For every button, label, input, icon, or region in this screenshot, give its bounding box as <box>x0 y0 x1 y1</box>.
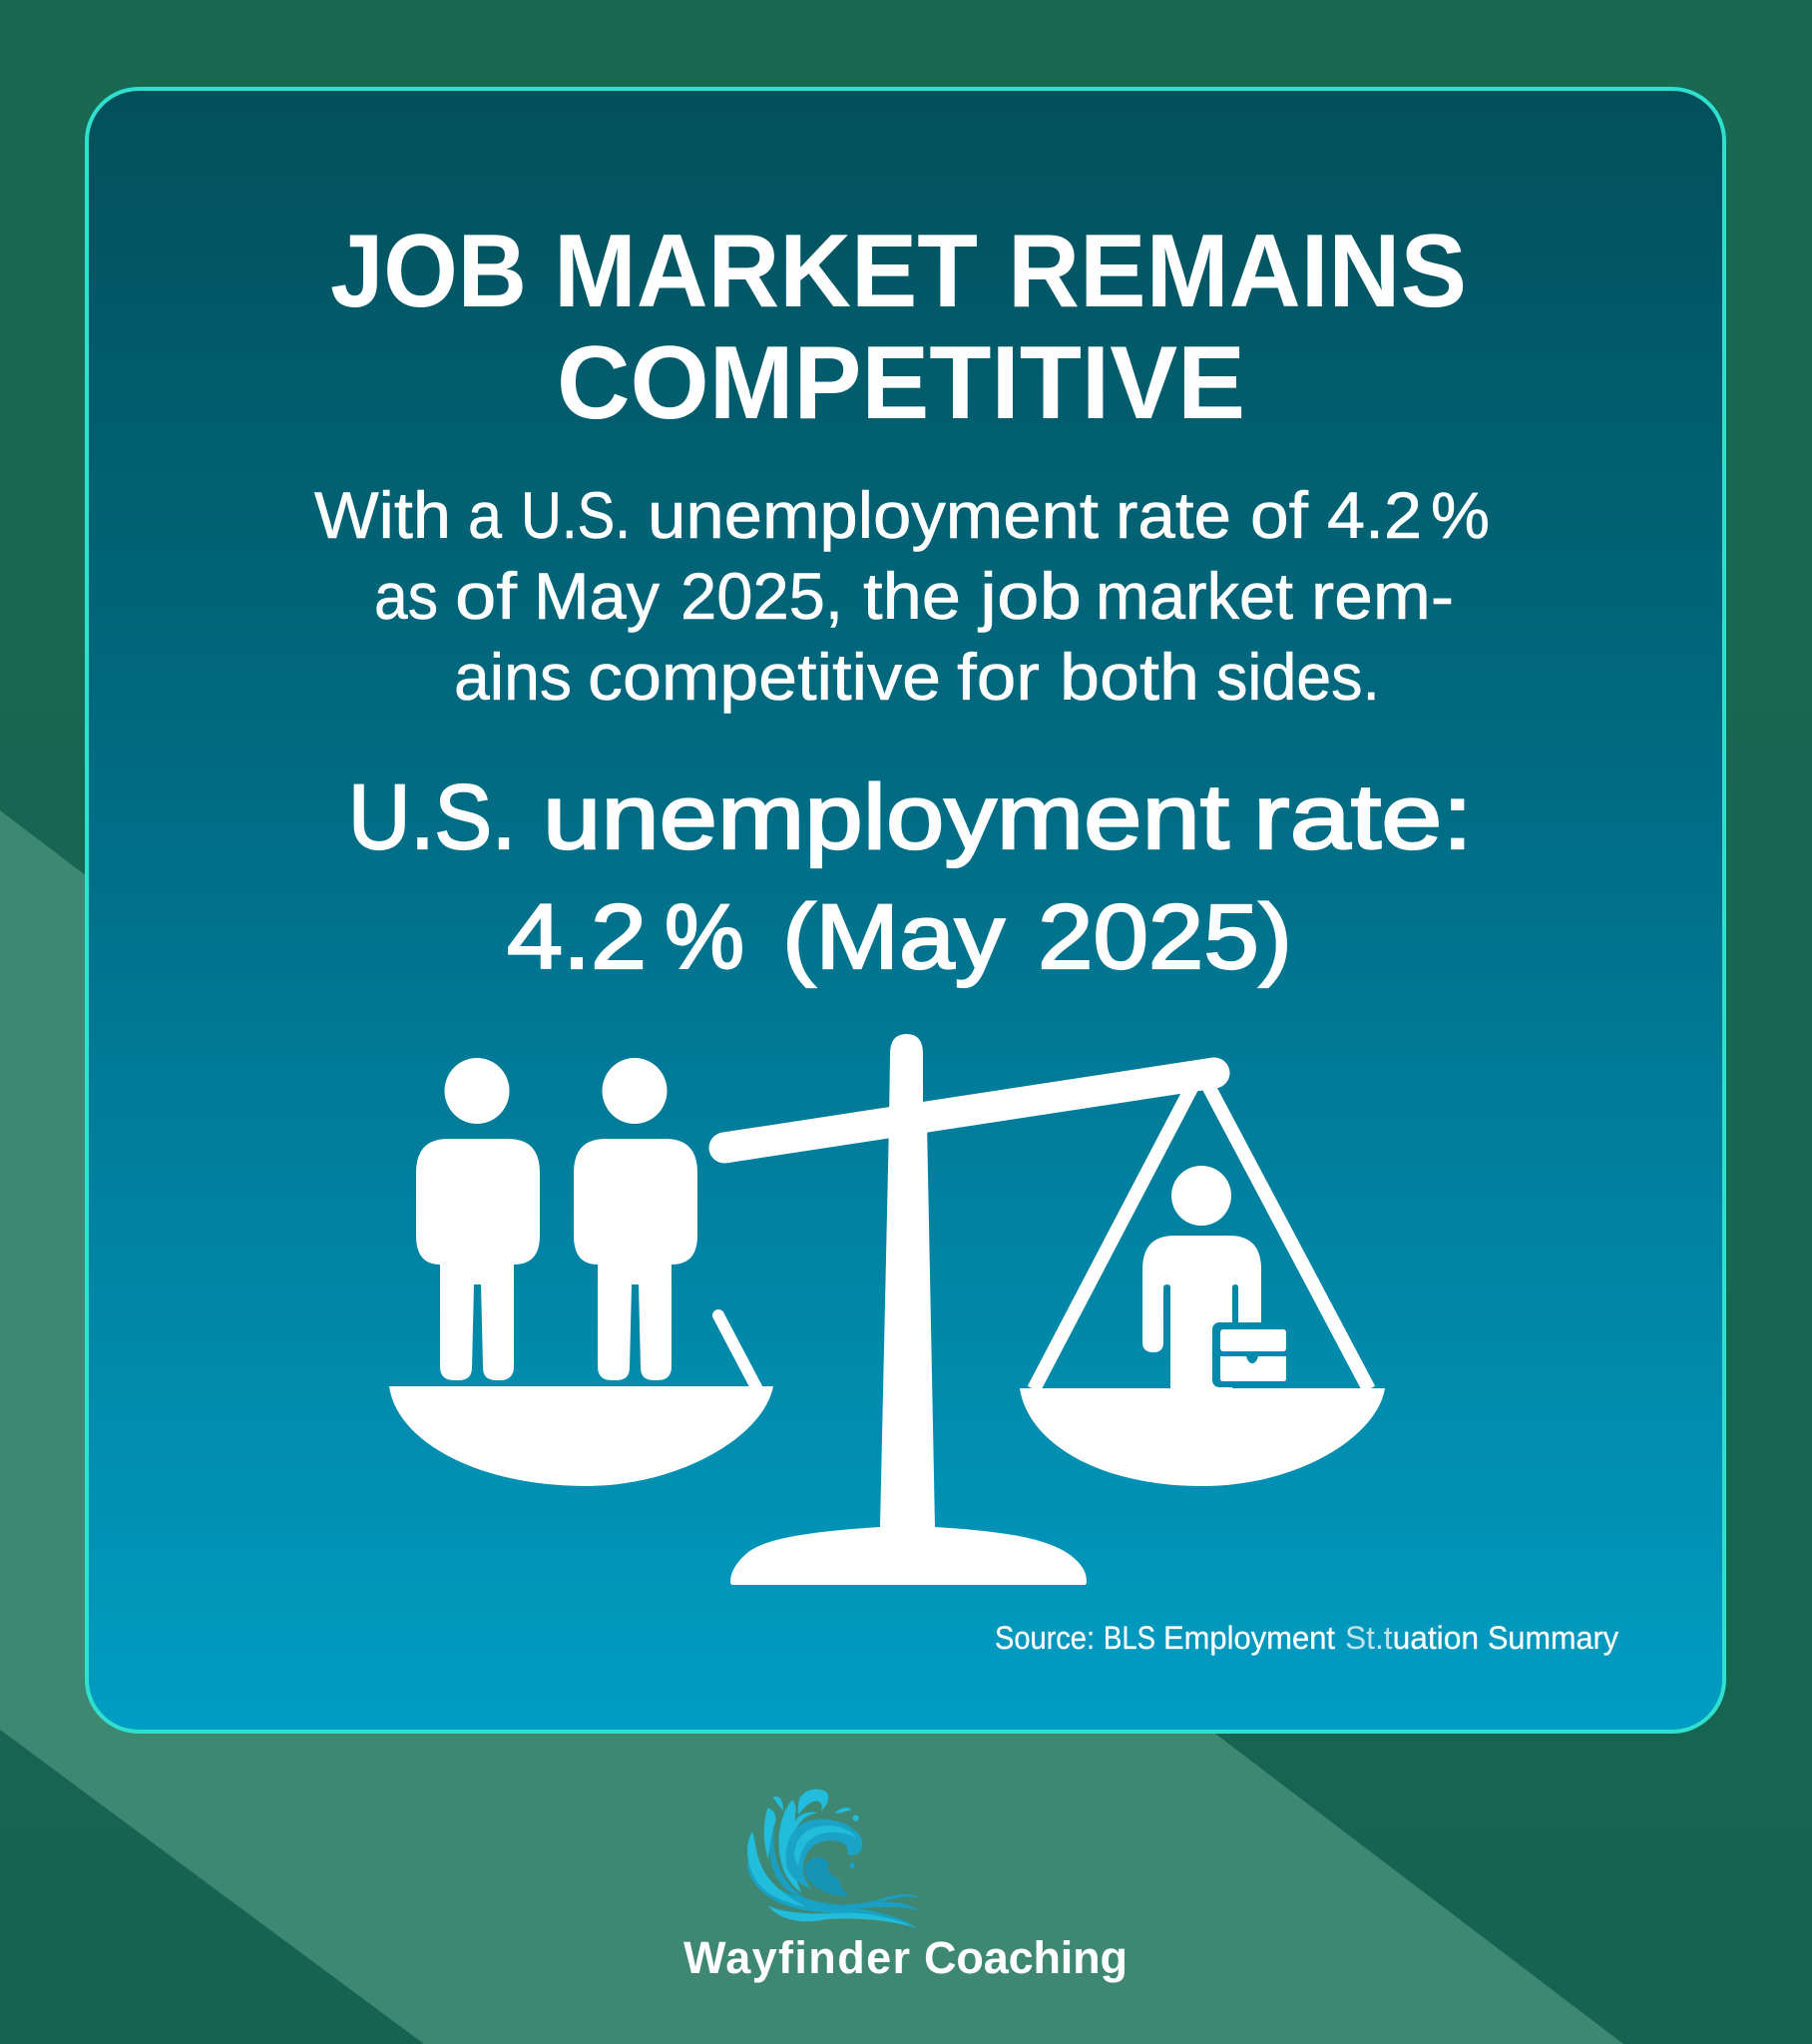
intro text block: ains <box>454 640 572 714</box>
intro text block: as <box>374 559 438 633</box>
person with briefcase <box>1142 1166 1286 1389</box>
title <box>330 214 1467 441</box>
intro text block: of <box>1250 478 1309 552</box>
statistic heading: U.S. <box>348 766 516 868</box>
logo wordmark: Coaching <box>924 1932 1128 1983</box>
briefcase <box>1212 1322 1286 1387</box>
source note: St.tuation <box>1345 1620 1479 1656</box>
intro text block: U.S. <box>521 478 631 552</box>
statistic heading: unemployment <box>543 766 1229 868</box>
title: JOB <box>330 214 527 329</box>
icon: wave logo <box>746 1789 921 1928</box>
title: REMAINS <box>1008 214 1467 329</box>
intro text block: 2025, <box>680 559 843 633</box>
left pan <box>389 1386 773 1486</box>
intro text block: rate <box>1116 478 1231 552</box>
person 1 <box>416 1058 540 1380</box>
source note: Employment <box>1163 1620 1335 1656</box>
source note: Source: <box>995 1620 1095 1656</box>
statistic heading: % <box>665 886 744 988</box>
right pan <box>1020 1388 1385 1486</box>
intro text block: 4.2 <box>1327 478 1422 552</box>
title: MARKET <box>554 214 978 329</box>
intro text block: market <box>1096 559 1293 633</box>
panel: main card <box>87 89 1724 1732</box>
statistic heading: rate: <box>1253 766 1473 868</box>
statistic heading: (May <box>782 886 1005 988</box>
intro text block: job <box>978 559 1082 633</box>
intro text block: a <box>468 478 502 552</box>
intro text block: unemployment <box>648 478 1099 552</box>
statistic heading: 2025) <box>1038 886 1292 988</box>
intro text block: rem- <box>1311 559 1454 633</box>
icon: balance scale with job seekers and a job <box>389 1034 1385 1585</box>
intro text block: May <box>534 559 660 633</box>
statistic heading: 4.2 <box>507 886 647 988</box>
right pan strings <box>1034 1071 1369 1389</box>
intro text block: competitive <box>588 640 941 714</box>
intro text block: of <box>455 559 518 633</box>
source note: Summary <box>1488 1620 1618 1656</box>
intro text block <box>314 478 1490 714</box>
intro text block: sides. <box>1216 640 1380 714</box>
statistic heading <box>348 766 1473 988</box>
intro text block: With <box>314 478 451 552</box>
person 2 <box>574 1058 697 1380</box>
logo wordmark: Wayfinder <box>683 1932 910 1983</box>
source note <box>995 1620 1618 1656</box>
intro text block: both <box>1060 640 1199 714</box>
left pan string <box>718 1315 757 1389</box>
logo wordmark <box>683 1932 1128 1983</box>
intro text block: % <box>1431 478 1490 552</box>
scale beam <box>724 1073 1214 1148</box>
intro text block: the <box>863 559 961 633</box>
title: COMPETITIVE <box>557 325 1245 441</box>
source note: BLS <box>1104 1620 1155 1656</box>
intro text block: for <box>957 640 1040 714</box>
scale post and base <box>730 1034 1087 1585</box>
